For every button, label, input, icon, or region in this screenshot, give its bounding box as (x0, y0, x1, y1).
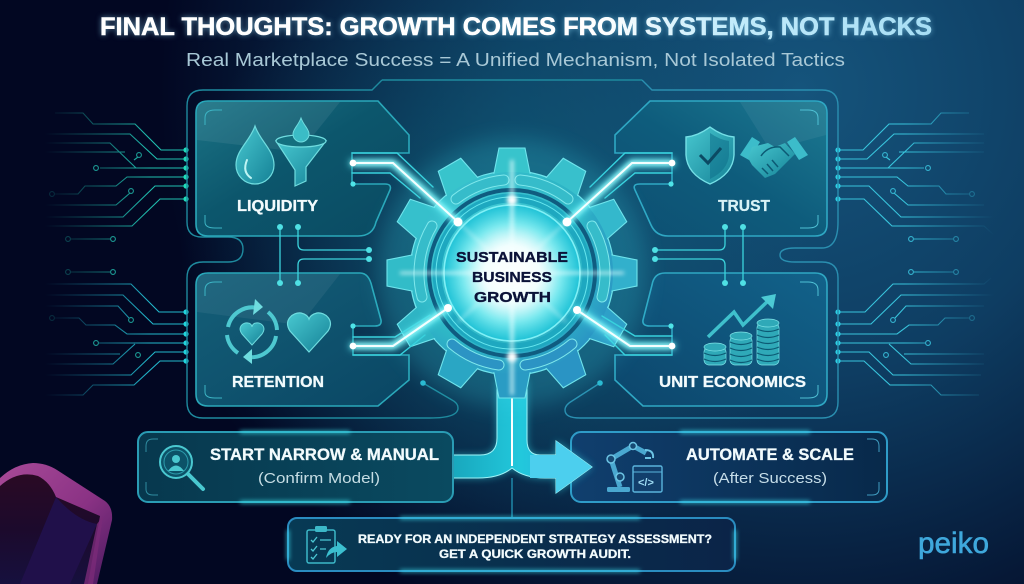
center label (456, 249, 568, 306)
icon: heart (288, 313, 330, 352)
text: automate: AUTOMATE & SCALE (686, 446, 854, 464)
box: strategy assessment call to action: GET A QUICK GROWTH AUDIT. (439, 549, 631, 561)
trunk and arrow (450, 360, 592, 517)
panel: unit economics (615, 273, 827, 406)
outer border trace right (565, 80, 838, 418)
icon: retention cycle with heart (227, 299, 277, 364)
outer border trace left (187, 80, 458, 418)
panel: trust (615, 101, 827, 236)
center label: SUSTAINABLE (456, 249, 568, 266)
top connector trace (382, 79, 642, 81)
icon: robot arm and code window: </> (638, 477, 654, 489)
icon: magnifier with person (160, 446, 203, 489)
box: strategy assessment call to action (288, 518, 735, 571)
box: start narrow and manual: (Confirm Model) (258, 470, 380, 487)
label: unit economics: UNIT ECONOMICS (659, 374, 806, 391)
subtitle: Real Marketplace Success = A Unified Mechanism, Not Isolated Tactics (186, 50, 845, 70)
connectors between right panels (652, 224, 746, 286)
decorative pink 3d shape (0, 463, 112, 584)
icon: growth arrow and coins (704, 294, 779, 365)
icon: water drop (236, 126, 274, 184)
label: liquidity: LIQUIDITY (237, 198, 318, 215)
gear (377, 138, 647, 408)
box: automate and scale (571, 432, 887, 502)
bright connector traces (352, 153, 672, 355)
title: FINAL THOUGHTS: GROWTH COMES FROM SYSTEMS, NOT HACKS (100, 13, 932, 41)
box: start narrow and manual (138, 432, 453, 502)
icon: clipboard with arrow (307, 526, 347, 563)
connector dots (350, 160, 675, 349)
center label: BUSINESS (472, 269, 552, 286)
gear rings (429, 190, 595, 356)
text: start narrow: START NARROW & MANUAL (210, 446, 439, 464)
connectors between left panels (277, 224, 372, 286)
gear pill segments (419, 180, 605, 365)
gear light flares (400, 160, 624, 395)
label: trust: TRUST (718, 198, 770, 215)
icon: shield (686, 127, 734, 184)
left circuit traces (20, 113, 189, 395)
text: call to action: READY FOR AN INDEPENDENT STRATEGY ASSESSMENT? (358, 534, 712, 546)
bottom connector line (511, 478, 513, 517)
panel: liquidity (196, 101, 409, 236)
logo: peiko: peiko (918, 527, 989, 560)
icon: robot arm and code window (607, 442, 662, 492)
icon: funnel (276, 118, 326, 186)
center label: GROWTH (474, 289, 551, 306)
right circuit traces (835, 113, 1004, 395)
box: automate and scale: (After Success) (713, 470, 827, 487)
icon: handshake (740, 137, 808, 178)
label: retention: RETENTION (232, 374, 324, 391)
trace end dots (420, 380, 603, 386)
panel: retention (196, 273, 409, 406)
